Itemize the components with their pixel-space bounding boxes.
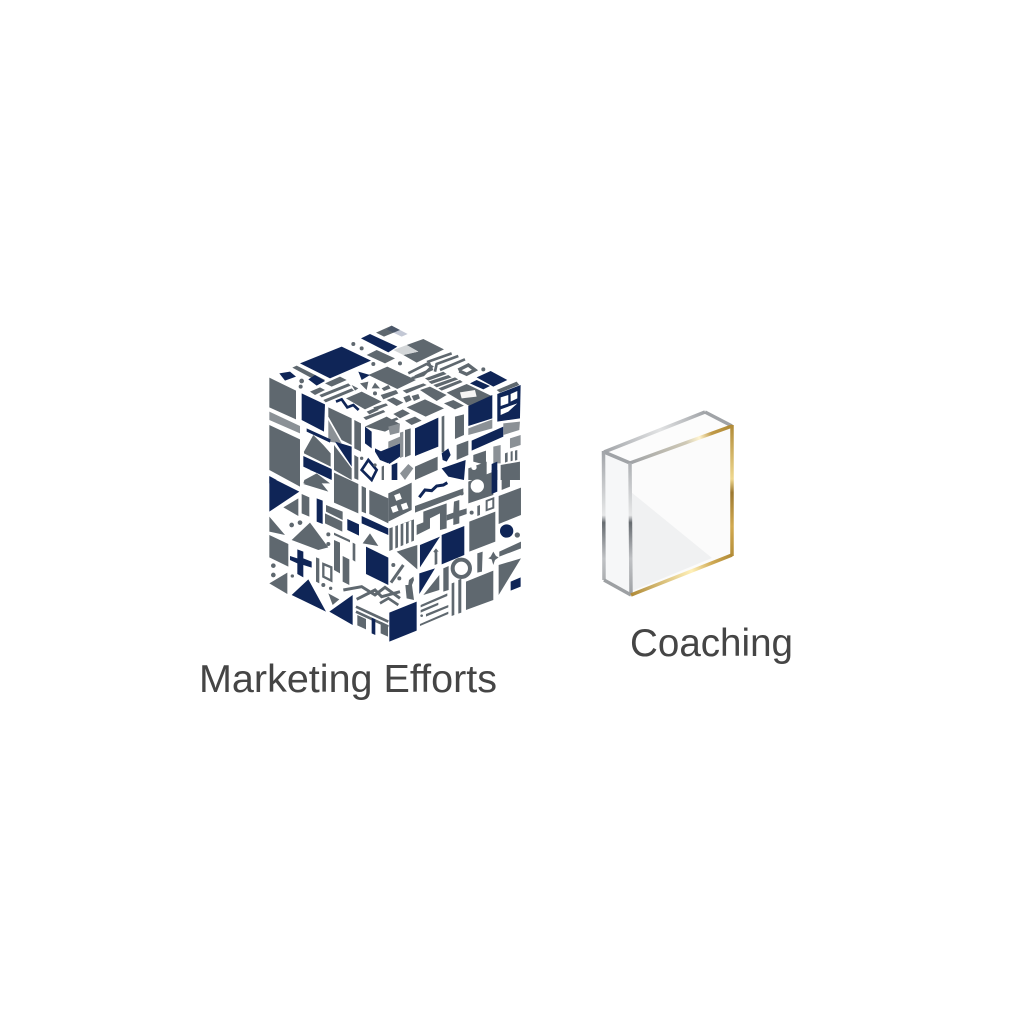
icon: glass block (Coaching) <box>604 412 732 595</box>
glass reflection <box>631 492 712 591</box>
label: Coaching: Coaching <box>630 622 793 665</box>
label: Marketing Efforts: Marketing Efforts <box>199 658 497 701</box>
left face top <box>269 378 296 419</box>
glass edges <box>604 412 732 595</box>
cube lower section <box>269 470 521 642</box>
glass top face <box>604 412 732 463</box>
icon: mosaic cube (Marketing Efforts) <box>269 326 521 642</box>
right face lower <box>389 602 417 642</box>
cube upper section <box>269 326 521 487</box>
right face top <box>468 395 492 426</box>
glass side face <box>604 452 631 595</box>
glass front face <box>630 426 732 595</box>
